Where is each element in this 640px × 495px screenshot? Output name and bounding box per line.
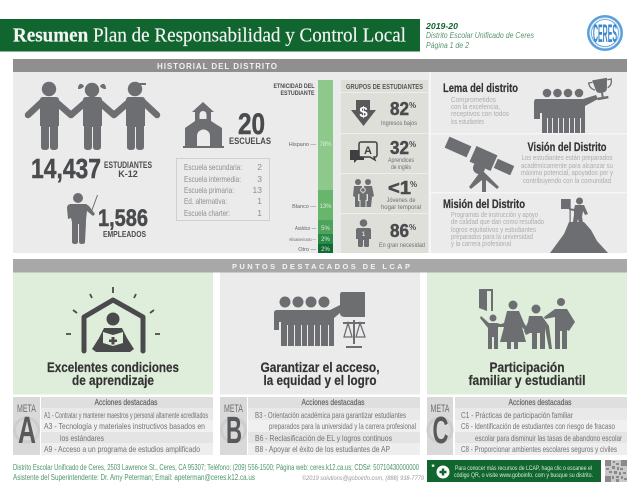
goal A actions table: Acciones destacadas	[94, 397, 158, 407]
goal B badge: META	[224, 403, 243, 415]
goal C badge: C	[432, 410, 448, 452]
icon: low income arrow: $	[359, 104, 368, 121]
section heading: LCAP highlights: PUNTOS DESTACADOS DE LCAP	[232, 262, 410, 271]
goal A actions table	[41, 397, 213, 455]
footer contact text: ©2019 solutions@goboinfo.com, (888) 938-7779	[302, 474, 424, 482]
chart title: ETNICIDAD DEL	[274, 84, 315, 90]
goal B actions table: Acciones destacadas	[302, 397, 364, 407]
stat: foster youth: %	[410, 180, 417, 189]
school types table: 1	[257, 196, 262, 206]
school count: 20	[238, 108, 265, 141]
panel: district mission: de calidad que dan como resultado	[451, 217, 544, 226]
stat: low income: %	[409, 101, 416, 110]
chart: student ethnicity: Otro —	[298, 247, 316, 253]
icon: foster family	[353, 179, 374, 207]
icon: telescope	[445, 137, 514, 192]
goal A actions table: los estándares	[60, 433, 104, 443]
school types table: 1	[257, 208, 262, 218]
panel: district motto: los estudiantes	[451, 117, 484, 126]
stat: foster youth: Jóvenes de	[386, 197, 416, 204]
panel: district background	[13, 59, 627, 253]
header title banner	[0, 19, 420, 52]
panel: district motto	[429, 72, 627, 253]
header district info	[425, 21, 535, 50]
stat: high need	[379, 221, 425, 249]
icon: english learners speech bubbles	[350, 142, 377, 163]
chart: student ethnicity: 2%	[321, 237, 331, 243]
stat: high need: %	[409, 223, 416, 232]
panel: student groups	[341, 80, 428, 253]
icon: english learners speech bubbles: A	[364, 145, 372, 157]
student count: ESTUDIANTES	[104, 160, 152, 170]
panel: goal A	[13, 272, 213, 394]
school types table: Ed. alternativa:	[184, 196, 227, 206]
chart: student ethnicity: Blanco —	[292, 204, 316, 210]
panel: district motto: con la excelencia,	[451, 102, 500, 111]
chart: student ethnicity: Afroamericano —	[289, 237, 316, 242]
goal A heading: de aprendizaje	[72, 372, 154, 388]
panel: district vision: contribuyendo con la comunidad	[523, 176, 611, 185]
chart: student ethnicity: 13%	[319, 204, 332, 210]
goal C heading	[468, 359, 586, 388]
goal B actions table: B8 - Apoyar el éxito de los estudiantes de AP	[255, 444, 390, 454]
panel: district mission	[443, 197, 608, 253]
goal C actions table	[455, 397, 627, 455]
goal A badge: A	[18, 410, 36, 452]
stat: english learners	[388, 138, 416, 171]
goal A heading: Excelentes condiciones	[47, 359, 179, 375]
goal C badge	[427, 397, 453, 455]
header title banner: Resumen Plan de Responsabilidad y Control Local	[13, 24, 406, 46]
callout: more LCAP resources	[427, 460, 601, 482]
chart: student ethnicity: 5%	[321, 226, 331, 232]
chart title: ESTUDIANTE	[280, 91, 314, 97]
icon: high need student	[356, 219, 371, 247]
stat: high need: 86	[390, 221, 409, 241]
icon: teacher	[67, 193, 98, 244]
panel: district vision: Los estudiantes están preparados	[522, 153, 613, 162]
footer contact text: Asistente del Superintendente: Dr. Amy Peterman; Email: apeterman@ceres.k12.ca.us	[13, 473, 255, 482]
footer contact text: Distrito Escolar Unificado de Ceres, 2503 Lawrence St., Ceres, CA 95307; Teléfono: (209) 556-1500; Página web: ceres.k12.ca.us; CDS#: 50710430000000	[13, 463, 419, 472]
school types table: Escuela primaria:	[184, 185, 234, 195]
panel: district vision: Visión del Distrito	[528, 140, 606, 154]
employee count: EMPLEADOS	[103, 229, 146, 239]
icon: QR code	[605, 460, 627, 482]
icon: high need student: 1	[362, 232, 366, 238]
callout: more LCAP resources: código QR, o visite www.goboinfo. com y busque su distrito.	[454, 473, 593, 479]
school types table: Escuela intermedia:	[184, 174, 241, 184]
panel: goal C	[427, 272, 627, 394]
callout: more LCAP resources: *	[431, 463, 435, 472]
icon: low income arrow	[351, 100, 376, 126]
stat: english learners: de inglés	[391, 164, 412, 171]
section heading: LCAP highlights	[13, 259, 627, 272]
panel: goal B	[220, 272, 420, 394]
school count	[229, 108, 271, 147]
icon: district logo	[587, 15, 623, 51]
panel: district mission: preparados para la universidad	[451, 232, 533, 241]
goal A heading	[47, 359, 179, 388]
chart: student ethnicity: Hispano —	[289, 142, 316, 148]
icon: house with reader	[66, 287, 160, 352]
stat: low income: 82	[390, 99, 409, 119]
school types table: 3	[257, 174, 262, 184]
stat: foster youth	[381, 178, 421, 211]
footer contact text	[13, 463, 424, 482]
goal B badge: B	[226, 410, 242, 452]
goal B actions table: preparados para la universidad y la carrera profesional	[269, 421, 416, 431]
goal B heading	[260, 359, 380, 388]
goal B actions table	[248, 397, 420, 455]
goal B heading: la equidad y el logro	[264, 372, 376, 388]
school types table: 13	[253, 185, 262, 195]
chart: student ethnicity	[274, 80, 333, 253]
panel: district mission: Misión del Distrito	[443, 197, 525, 211]
icon: three students	[28, 82, 157, 150]
goal B badge	[220, 397, 247, 455]
student count: 14,437	[31, 153, 101, 184]
panel: district mission: y la carrera profesional	[451, 239, 511, 248]
icon: family and door	[479, 289, 575, 349]
stat: foster youth: hogar temporal	[381, 204, 421, 211]
header district info: 2019-20	[425, 21, 458, 31]
stat: foster youth: <1	[388, 178, 411, 198]
school types table: 2	[257, 162, 262, 172]
goal C heading: familiar y estudiantil	[468, 372, 586, 388]
goal B actions table: B3 - Orientación académica para garantizar estudiantes	[255, 410, 406, 420]
stat: english learners: %	[409, 140, 416, 149]
goal C actions table: Acciones destacadas	[508, 397, 572, 407]
goal A actions table: A9 - Acceso a un programa de estudios amplificado	[44, 444, 200, 454]
header district info: Página 1 de 2	[426, 40, 469, 50]
icon: group with book and scales	[274, 292, 365, 347]
callout: more LCAP resources: Para conocer más recursos de LCAP, haga clic o escanee el	[455, 466, 592, 472]
student count: K-12	[118, 169, 138, 179]
panel: district mission: Programas de instrucción y apoyo	[451, 210, 538, 219]
panel: district motto: Comprometidos	[451, 95, 496, 104]
school types table	[176, 158, 270, 220]
stat: low income: Ingresos bajos	[381, 120, 418, 127]
employee count: 1,586	[98, 205, 148, 232]
panel: district mission: logros equitativos y estudiantes	[451, 225, 536, 234]
chart: student ethnicity: 78%	[319, 142, 332, 148]
panel: district motto: receptivos con todos	[451, 109, 509, 118]
chart: student ethnicity: 2%	[321, 247, 331, 253]
school count: ESCUELAS	[229, 136, 271, 147]
panel: district motto: Lema del distrito	[443, 81, 518, 95]
school types table: Escuela secundaria:	[184, 162, 242, 172]
header district info: Distrito Escolar Unificado de Ceres	[426, 30, 535, 40]
stat: low income	[381, 99, 418, 127]
icon: school building	[183, 102, 224, 148]
panel: district vision: máximo potencial, apoyados por y	[521, 168, 613, 177]
chart title	[274, 84, 315, 97]
goal A badge: META	[17, 403, 36, 415]
section heading: historial	[13, 59, 627, 72]
goal C badge: META	[430, 403, 450, 415]
employee count	[98, 205, 148, 239]
goal C actions table: C1 - Prácticas de participación familiar	[461, 410, 573, 420]
goal A actions table: A3 - Tecnología y materiales instructivos basados en	[44, 421, 205, 431]
icon: group with trophy	[534, 77, 614, 133]
panel: district vision	[445, 137, 613, 192]
goal C heading: Participación	[490, 359, 564, 375]
stat: english learners: 32	[390, 138, 409, 158]
panel: district vision: académicamente para alcanzar su	[521, 161, 613, 170]
goal B heading: Garantizar el acceso,	[260, 359, 380, 375]
stat: high need: En gran necesidad	[379, 242, 425, 249]
goal B actions table: B6 - Reclasificación de EL y logros continuos	[255, 433, 392, 443]
chart: student ethnicity: Asiático —	[295, 226, 316, 232]
stat: english learners: Aprendices	[388, 157, 415, 164]
goal A actions table: A1 - Contratar y mantener maestros y personal altamente acreditados	[44, 410, 208, 420]
school types table: Escuela charter:	[184, 208, 230, 218]
section heading: historial: HISTORIAL DEL DISTRITO	[157, 62, 277, 71]
icon: mountain with flag	[550, 198, 608, 253]
group heading: GRUPOS DE ESTUDIANTES	[346, 82, 423, 91]
goal A badge	[13, 397, 40, 455]
